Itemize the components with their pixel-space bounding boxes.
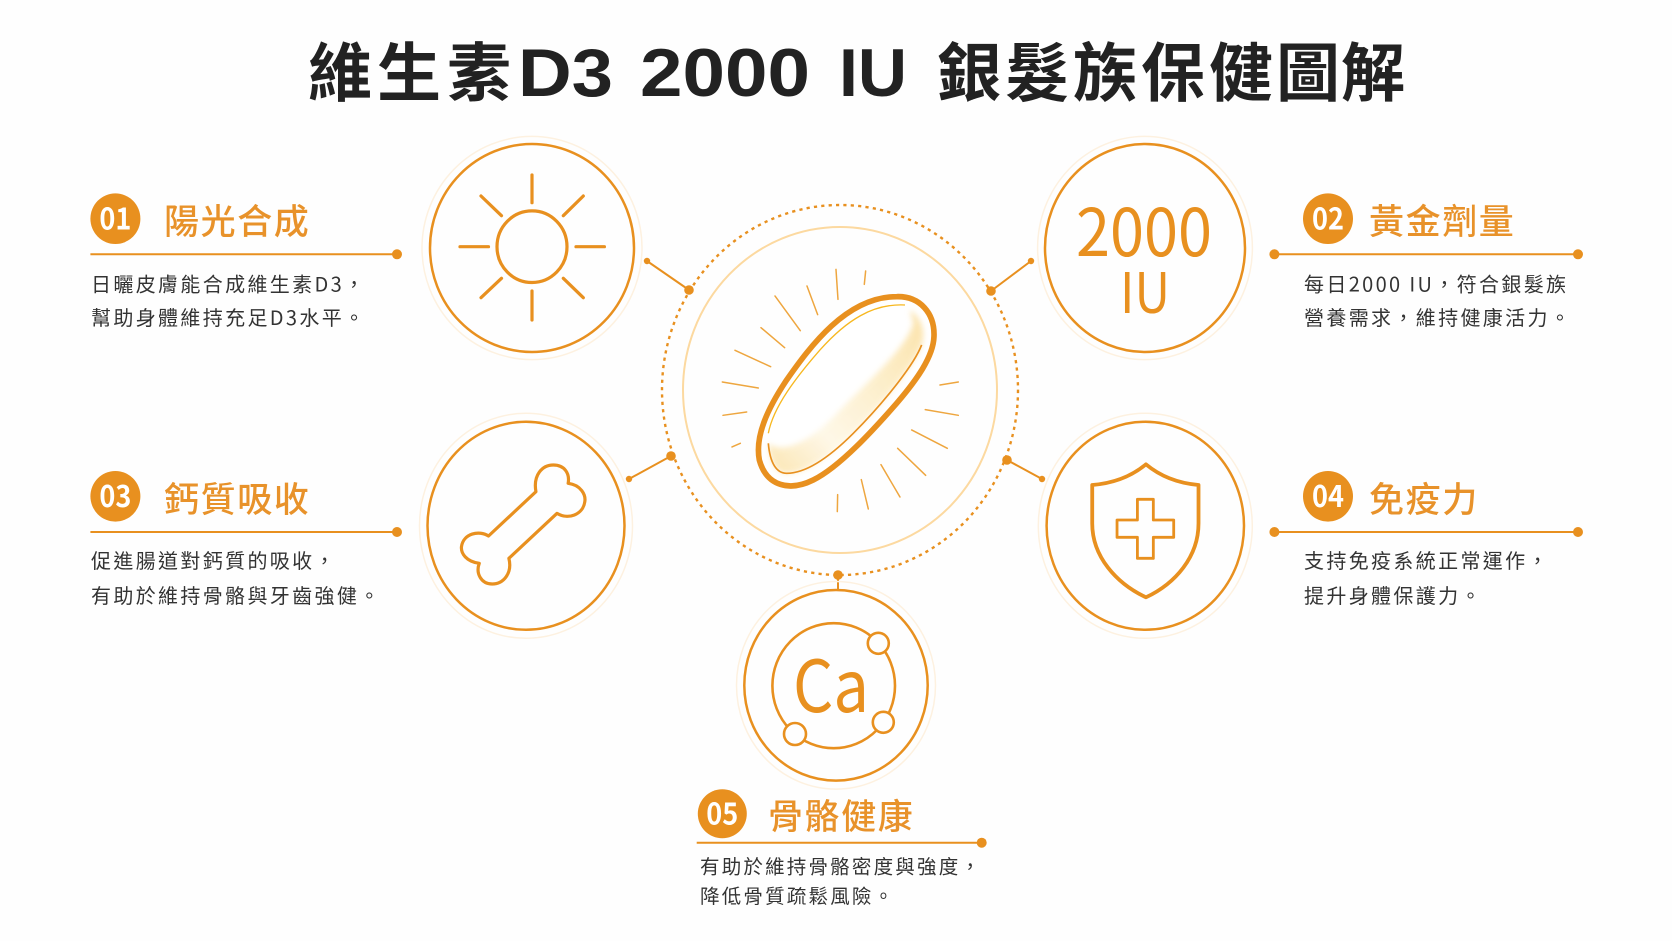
connectors [626, 258, 1045, 590]
heading 01: 陽光合成 [164, 194, 310, 245]
text 05: 有助於維持骨骼密度與強度， [700, 850, 982, 880]
title: 2000 [640, 35, 810, 111]
dotted outer ring [662, 205, 1018, 575]
title [308, 23, 1405, 115]
badge 01 [90, 193, 140, 244]
title: IU [839, 35, 907, 111]
badge 05: 05 [706, 790, 738, 834]
badge 01: 01 [99, 194, 131, 238]
text 01: 日曬皮膚能合成維生素D3， [91, 268, 366, 298]
central capsule illustration [662, 205, 1018, 575]
text 02: 營養需求，維持健康活力。 [1304, 302, 1572, 331]
text 01: 幫助身體維持充足D3水平。 [91, 302, 366, 331]
panel: 05 bone health [697, 789, 987, 909]
icon: calcium [736, 582, 936, 789]
icon: 2000 IU: 2000 [1076, 180, 1212, 276]
icon: 2000 IU [1038, 136, 1252, 360]
rule 03 [90, 527, 402, 537]
rule 05 [697, 838, 987, 848]
heading 03: 鈣質吸收 [164, 472, 310, 523]
badge 03 [90, 471, 140, 522]
heading 04: 免疫力 [1369, 472, 1479, 523]
rule 02 [1269, 249, 1583, 259]
text 03: 促進腸道對鈣質的吸收， [91, 545, 337, 574]
text 04: 提升身體保護力。 [1304, 580, 1483, 609]
title: 銀髮族保健圖解 [937, 23, 1405, 115]
panel: 04 immunity [1269, 471, 1583, 609]
icon: shield [1038, 413, 1252, 638]
badge 05 [698, 789, 747, 838]
text 03: 有助於維持骨骼與牙齒強健。 [91, 580, 382, 609]
capsule [758, 297, 934, 486]
panel: 02 golden dosage [1269, 193, 1583, 331]
icon: sun [422, 136, 642, 360]
badge 02 [1303, 193, 1353, 244]
badge 04: 04 [1312, 472, 1344, 516]
inner pale ring [683, 227, 997, 553]
badge 02: 02 [1312, 194, 1344, 238]
rule 01 [90, 249, 402, 259]
title: D3 [518, 35, 613, 111]
badge 04 [1303, 471, 1353, 522]
capsule rays [722, 269, 958, 512]
panel: 01 sunlight synthesis [90, 193, 402, 331]
icon: calcium: Ca [793, 628, 869, 733]
icon: 2000 IU: IU [1120, 249, 1170, 330]
text 05: 降低骨質疏鬆風險。 [700, 880, 895, 909]
heading 02: 黃金劑量 [1369, 194, 1515, 245]
text 04: 支持免疫系統正常運作， [1304, 545, 1550, 574]
panel: 03 calcium absorption [90, 471, 402, 609]
text 02: 每日2000 IU，符合銀髮族 [1304, 268, 1568, 298]
title: 維生素 [308, 23, 511, 115]
badge 03: 03 [99, 472, 131, 516]
heading 05: 骨骼健康 [768, 789, 914, 840]
rule 04 [1269, 527, 1583, 537]
icon: bone [420, 413, 632, 638]
